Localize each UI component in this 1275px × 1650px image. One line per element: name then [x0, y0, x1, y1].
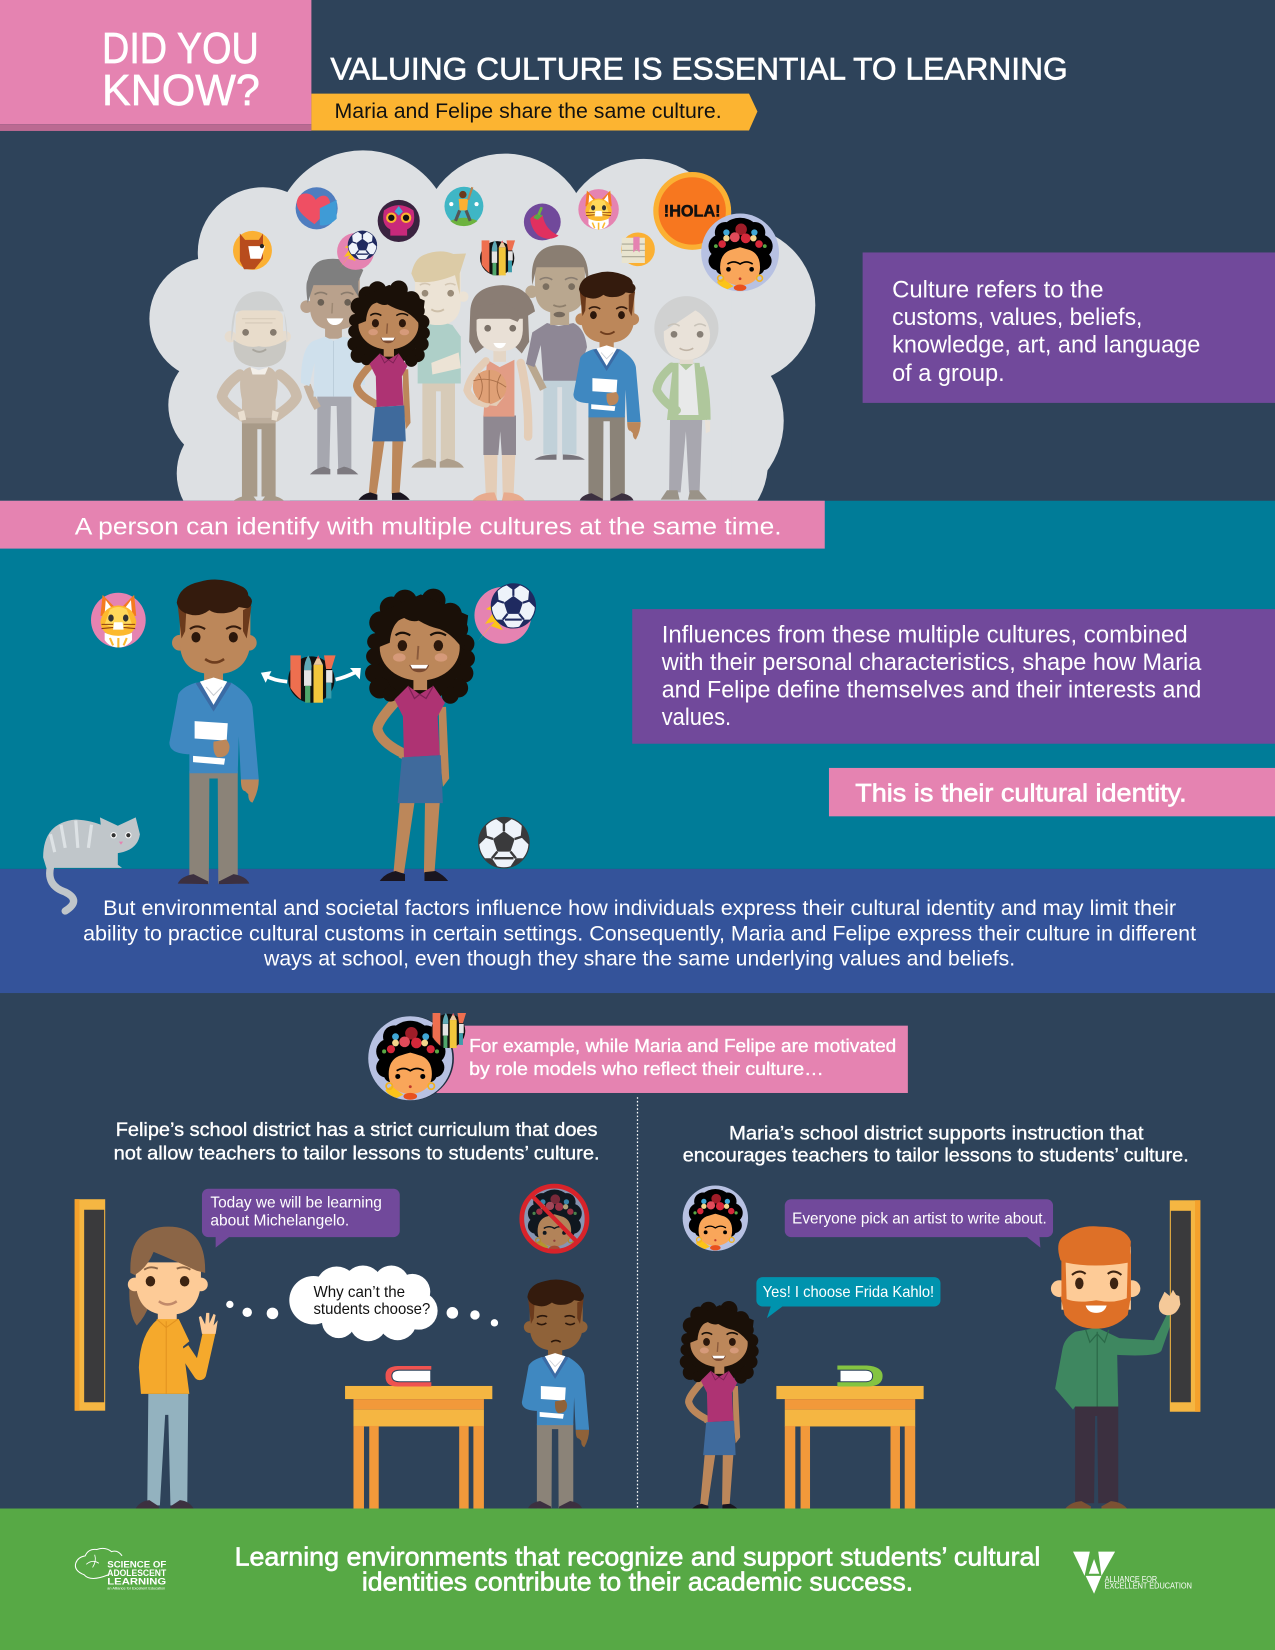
text block: environmental and societal factors: ways at school, even though they share the same underlying values and beliefs.	[263, 946, 1015, 971]
closing statement: Learning environments that recognize and support students’ cultural	[235, 1543, 1040, 1571]
person: grey-haired man	[300, 259, 365, 474]
text: Maria's district	[683, 1122, 1189, 1166]
icon: cat badge	[91, 593, 146, 647]
thought dots left	[226, 1301, 278, 1319]
speech bubble: Michelangelo	[202, 1189, 400, 1248]
icon: cat	[578, 189, 619, 230]
logo: Alliance for Excellent Education	[1073, 1552, 1192, 1594]
icon: art supplies with arrows	[261, 655, 361, 703]
closing statement: identities contribute to their academic success.	[362, 1569, 913, 1597]
cultural icons in cloud	[233, 175, 779, 291]
person: woman with basketball	[467, 285, 535, 501]
Felipe sad student	[522, 1279, 589, 1509]
panel: culture definition: customs, values, beliefs,	[892, 305, 1142, 331]
Maria small	[680, 1301, 759, 1511]
speech bubble: everyone pick an artist	[785, 1199, 1053, 1248]
icon: grey cat	[43, 817, 140, 911]
thought cloud: why can't the students choose	[289, 1266, 438, 1341]
text: Felipe's district: not allow teachers to tailor lessons to students’ culture.	[114, 1142, 600, 1164]
icon: chili pepper	[524, 204, 561, 240]
header: did you know badge: KNOW?	[102, 67, 260, 115]
book: red	[386, 1366, 431, 1386]
icon: Frida with art supplies	[368, 1013, 466, 1100]
book: green	[837, 1365, 883, 1386]
panel: cultural identity callout	[829, 768, 1275, 816]
yellow ribbon: Maria and Felipe share the same culture.	[335, 100, 722, 123]
person: grey-haired woman in cardigan	[654, 296, 719, 500]
panel: culture definition: knowledge, art, and language	[892, 332, 1200, 358]
person: old bearded man	[222, 291, 297, 501]
panel: culture definition: Culture refers to the	[892, 278, 1104, 304]
closing statement	[235, 1543, 1040, 1597]
pink band: A person can identify with multiple cultures at the same time.	[75, 513, 782, 540]
logo: Alliance for Excellent Education: ALLIANCE FOR	[1105, 1575, 1157, 1584]
panel: culture definition: of a group.	[892, 361, 1005, 387]
icon: hola speech: !HOLA!	[664, 202, 721, 221]
panel: multiple cultures influence: with their personal characteristics, shape how Maria	[661, 650, 1202, 676]
speech bubble: Frida Kahlo choice	[756, 1277, 940, 1318]
text: Maria's district: Maria’s school district supports instruction that	[729, 1122, 1144, 1144]
footer band	[0, 1509, 1275, 1650]
logo: Science of Adolescent Learning: SCIENCE OF	[107, 1559, 167, 1569]
blue section background	[0, 869, 1275, 993]
panel: multiple cultures influence: Influences from these multiple cultures, combined	[662, 623, 1188, 649]
thought cloud: why can't the students choose: students choose?	[313, 1301, 430, 1318]
logo: Science of Adolescent Learning: LEARNING	[107, 1576, 166, 1586]
chalkboard right	[1170, 1200, 1200, 1412]
icon: Frida Kahlo	[701, 214, 779, 291]
speech bubble: Frida Kahlo choice: Yes! I choose Frida Kahlo!	[763, 1284, 934, 1301]
logo: Science of Adolescent Learning: an Alliance for Excellent Education	[107, 1587, 165, 1591]
icon: Frida portrait right	[683, 1185, 748, 1251]
thought cloud with crowd	[147, 150, 821, 564]
text: Felipe's district	[114, 1119, 600, 1164]
teacher hand over board	[1159, 1290, 1180, 1315]
thought dots right	[447, 1307, 498, 1327]
icon: art supplies	[480, 240, 515, 275]
panel: culture definition	[863, 252, 1275, 403]
panel: cultural identity callout: This is their cultural identity.	[855, 780, 1187, 808]
text block: environmental and societal factors: But environmental and societal factors influence how individuals express their cultural identity and may limit their	[103, 895, 1176, 920]
text block: environmental and societal factors	[83, 895, 1196, 971]
icon: fox	[233, 231, 272, 270]
desk left	[345, 1386, 492, 1509]
icon: no Frida	[522, 1186, 587, 1251]
speech bubble: Michelangelo: about Michelangelo.	[210, 1213, 349, 1230]
Felipe in crowd	[573, 272, 641, 501]
text: Maria's district: encourages teachers to tailor lessons to students’ culture.	[683, 1144, 1189, 1166]
icon: hola speech	[656, 175, 728, 247]
teacher: bearded man	[1051, 1226, 1174, 1510]
logo: Alliance for Excellent Education: EXCELLENT EDUCATION	[1105, 1581, 1192, 1590]
teacher: woman	[128, 1227, 218, 1509]
logo: Science of Adolescent Learning: ADOLESCENT	[107, 1568, 167, 1578]
icon: soccer ball on floor	[479, 817, 529, 868]
logo: Science of Adolescent Learning	[75, 1548, 167, 1591]
panel: multiple cultures influence: and Felipe define themselves and their interests and	[662, 677, 1201, 703]
person: man in grey sweater	[525, 245, 592, 460]
icon: book	[621, 232, 655, 266]
Maria in crowd	[347, 280, 430, 500]
speech bubble: Michelangelo: Today we will be learning	[210, 1195, 382, 1212]
icon: dancer	[444, 187, 483, 226]
icon: soccer badge	[474, 584, 536, 644]
icon: sugar skull	[378, 200, 420, 242]
panel: multiple cultures influence: values.	[662, 705, 731, 731]
chalkboard left	[75, 1199, 105, 1411]
icon: heart and music player	[296, 187, 338, 229]
desk right	[776, 1386, 924, 1509]
callout: role models: by role models who reflect their culture…	[469, 1058, 824, 1079]
text block: environmental and societal factors: ability to practice cultural customs in certain settings. Consequently, Maria and Felipe express their culture in different	[83, 920, 1196, 945]
thought cloud: why can't the students choose: Why can’t the	[313, 1284, 405, 1301]
header: did you know badge	[0, 0, 311, 131]
speech bubble: everyone pick an artist: Everyone pick an artist to write about.	[792, 1210, 1047, 1227]
Felipe large	[169, 580, 259, 884]
callout: role models: For example, while Maria and Felipe are motivated	[469, 1035, 896, 1056]
pink band	[0, 501, 825, 549]
text: Felipe's district: Felipe’s school district has a strict curriculum that does	[116, 1119, 598, 1141]
callout: role models	[437, 1026, 908, 1093]
person: blond man	[411, 251, 469, 468]
teal section background	[0, 501, 1275, 869]
yellow ribbon	[311, 94, 757, 130]
Maria large	[365, 589, 475, 881]
icon: soccer ball	[337, 231, 377, 270]
dotted divider	[636, 1097, 638, 1509]
panel: multiple cultures influence	[632, 609, 1275, 744]
title: VALUING CULTURE IS ESSENTIAL TO LEARNING	[330, 50, 1068, 86]
header: did you know badge: DID YOU	[102, 25, 259, 73]
